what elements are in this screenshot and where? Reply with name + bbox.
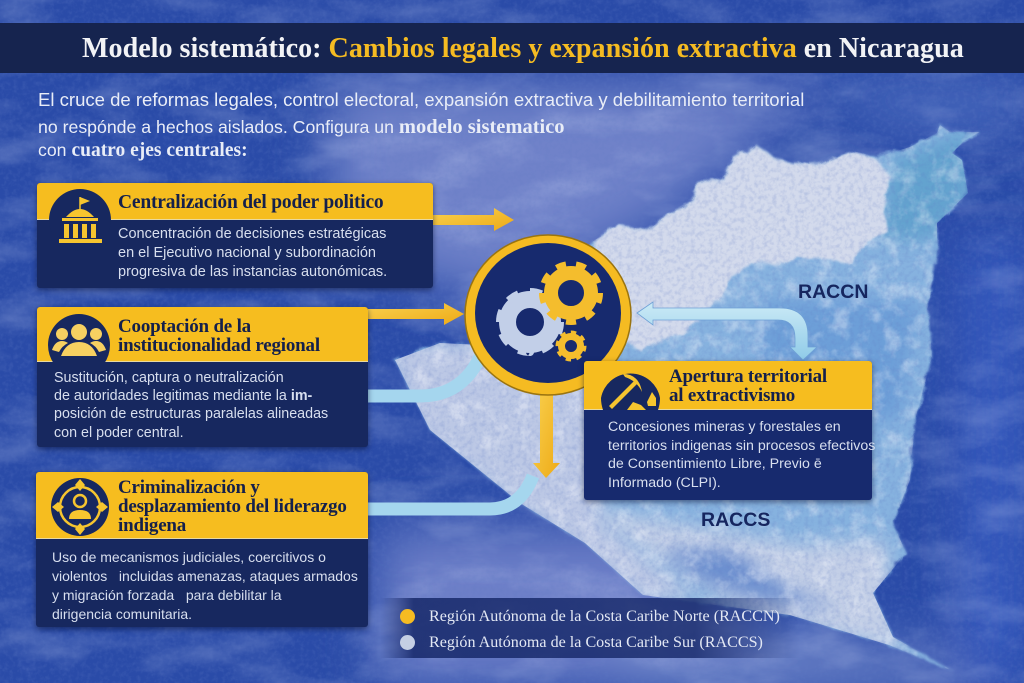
panel heading bar — [584, 361, 872, 410]
body text: Uso de mecanismos judiciales, coercitivos o — [52, 549, 326, 565]
body text — [54, 370, 328, 441]
heading: Apertura territorial — [669, 366, 827, 387]
heading — [669, 366, 827, 406]
icon: gold gear — [543, 265, 599, 321]
intro text — [38, 89, 804, 161]
intro text: con cuatro ejes centrales: — [38, 140, 248, 161]
body text: Informado (CLPI). — [608, 475, 721, 491]
label: RACCS: RACCS — [701, 509, 770, 531]
legend — [380, 598, 800, 658]
body text: dirigencia comunitaria. — [52, 606, 192, 622]
body text — [608, 419, 875, 491]
title banner — [0, 23, 1024, 73]
arrow: double headed to apertura — [637, 302, 817, 360]
pale northern region — [590, 145, 890, 350]
body text: con el poder central. — [54, 425, 184, 441]
icon: small gold gear — [558, 332, 584, 360]
arrow: centralización to gears — [433, 208, 514, 231]
heading: al extractivismo — [669, 385, 795, 406]
arrow: cooptación to gears — [368, 303, 464, 325]
body text: progresiva de las instancias autonómicas. — [118, 264, 387, 280]
label: RACCN: RACCN — [798, 281, 868, 303]
legend item: RACCS: Región Autónoma de la Costa Caribe Sur (RACCS) — [429, 634, 763, 651]
body text — [118, 226, 387, 280]
arrow: gears to centre bottom — [533, 385, 560, 478]
heading: indigena — [118, 515, 186, 536]
body text: en el Ejecutivo nacional y subordinación — [118, 245, 376, 261]
panel heading bar — [36, 472, 368, 539]
body text: violentos incluidas amenazas, ataques armados — [52, 568, 358, 584]
heading — [118, 477, 347, 536]
body text: Sustitución, captura o neutralización — [54, 370, 284, 386]
panel: criminalización — [36, 472, 368, 627]
body text: Concesiones mineras y forestales en — [608, 419, 841, 435]
body text — [52, 549, 358, 622]
body text: de Consentimiento Libre, Previo ē — [608, 456, 822, 472]
body text: y migración forzada para debilitar la — [52, 587, 282, 603]
arrow: criminalización curve — [368, 476, 533, 509]
heading: desplazamiento del liderazgo — [118, 496, 347, 517]
body text: de autoridades legitimas mediante la im- — [54, 388, 312, 404]
intro text: El cruce de reformas legales, control electoral, expansión extractiva y debilitamiento territorial — [38, 89, 804, 110]
body text: Concentración de decisiones estratégicas — [118, 226, 386, 242]
icon: target person — [51, 478, 109, 536]
legend item: RACCN: Región Autónoma de la Costa Caribe Norte (RACCN) — [429, 608, 780, 625]
icon: silver gear — [500, 292, 560, 352]
title: Modelo sistemático: Cambios legales y expansión extractiva en Nicaragua — [82, 33, 964, 64]
heading: Criminalización y — [118, 477, 260, 498]
intro text: no respónde a hechos aislados. Configura un modelo sistematico — [38, 116, 565, 138]
heading — [118, 316, 320, 356]
icon: government building — [49, 189, 111, 243]
panel heading bar — [37, 307, 368, 362]
panel heading bar — [37, 183, 433, 220]
heading: institucionalidad regional — [118, 335, 320, 356]
arrow: cooptación curve — [368, 350, 483, 396]
heading: Centralización del poder politico — [118, 192, 383, 213]
body text: territorios indigenas sin procesos efectivos — [608, 438, 875, 454]
panel: cooptación — [37, 307, 368, 447]
icon: pickaxe — [601, 374, 660, 410]
heading: Cooptación de la — [118, 316, 251, 337]
body text: posición de estructuras paralelas alineadas — [54, 406, 328, 422]
icon: people group — [48, 314, 110, 362]
panel: centralización — [37, 183, 433, 288]
panel: apertura — [584, 361, 872, 500]
